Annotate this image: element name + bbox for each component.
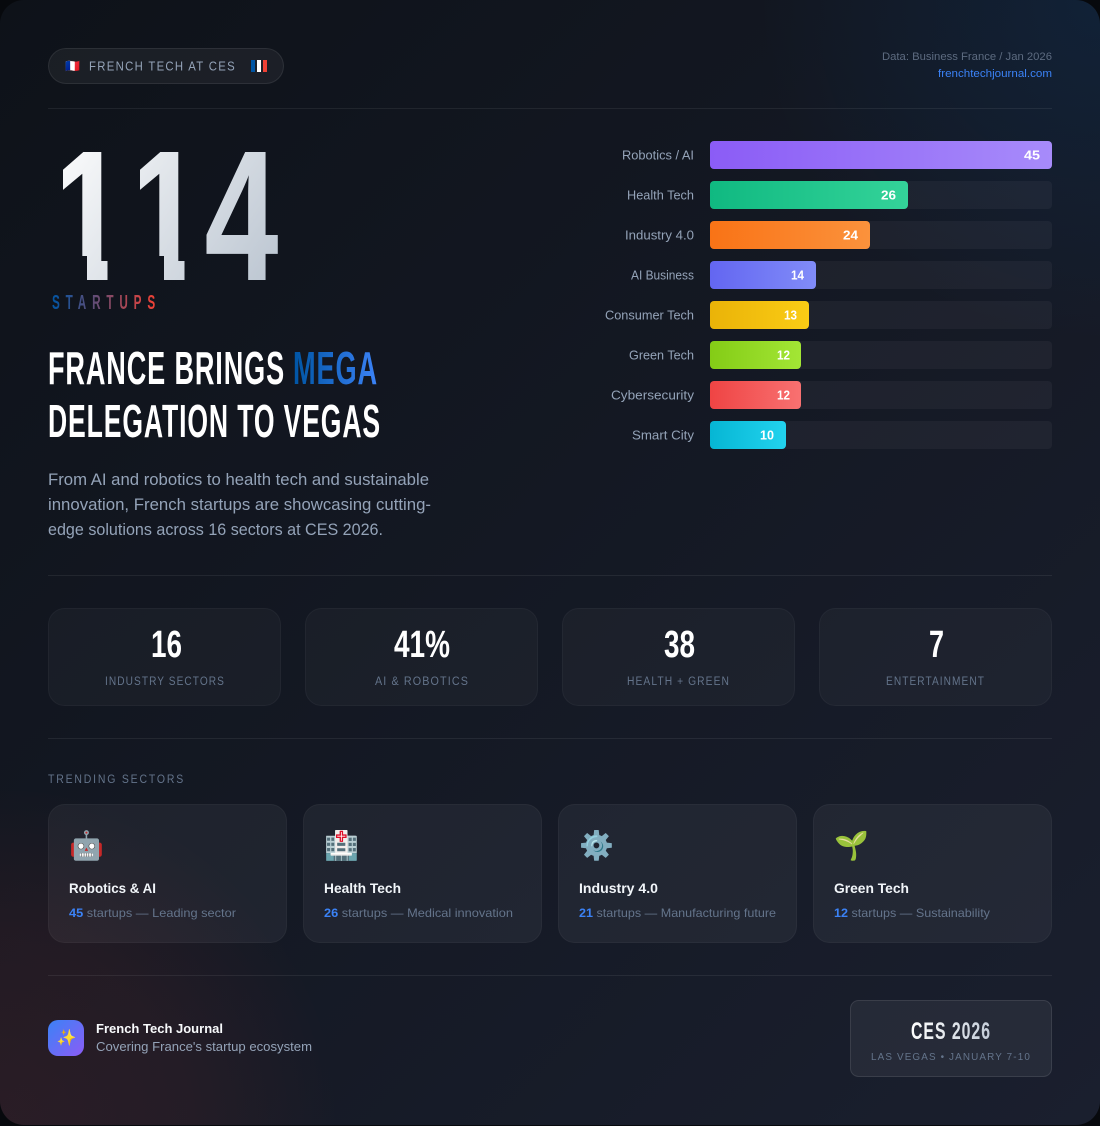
card title: Health Tech xyxy=(324,880,401,896)
stat card: entertainment xyxy=(820,608,1052,706)
intro paragraph: innovation, French startups are showcasing cutting- xyxy=(48,495,431,514)
source note: frenchtechjournal.com xyxy=(938,68,1052,80)
card detail: 45 startups — Leading sector xyxy=(69,906,236,920)
section heading: trending sectors: TRENDING SECTORS xyxy=(48,774,185,786)
headline: MEGA xyxy=(293,342,378,394)
stat card: AI and robotics xyxy=(306,608,538,706)
event badge: CES 2026: CES 2026 xyxy=(911,1018,991,1045)
card title: Industry 4.0 xyxy=(579,880,658,896)
bar chart: startups by sector: Robotics / AI xyxy=(622,148,694,162)
stat card: health and green xyxy=(562,608,794,706)
card detail: 26 startups — Medical innovation xyxy=(324,906,513,920)
card detail: 21 startups — Manufacturing future xyxy=(579,906,776,920)
sector card: health tech xyxy=(304,804,542,942)
bar chart: startups by sector: 14 xyxy=(791,268,805,282)
badge label: FRENCH TECH AT CES xyxy=(89,58,236,74)
intro paragraph: edge solutions across 16 sectors at CES 2026. xyxy=(48,520,383,539)
intro paragraph xyxy=(48,470,431,539)
card title: Green Tech xyxy=(834,880,909,896)
icon: French flag emoji: 🇫🇷 xyxy=(65,59,80,73)
icon: sparkles logo: ✨ xyxy=(56,1028,76,1047)
icon: sparkles logo xyxy=(48,1020,84,1056)
bar chart: startups by sector: 12 xyxy=(777,388,790,402)
bar chart: startups by sector: AI Business xyxy=(631,268,694,282)
event badge: CES 2026: LAS VEGAS • JANUARY 7-10 xyxy=(871,1051,1031,1063)
stat card: industry sectors: 16 xyxy=(151,624,182,666)
bar chart: startups by sector: Health Tech xyxy=(627,188,694,202)
icon: hospital: 🏥 xyxy=(324,829,359,862)
sector card: industry 4.0 xyxy=(558,804,796,942)
badge: French Tech at CES xyxy=(48,48,284,84)
bar chart: startups by sector: 13 xyxy=(784,308,797,322)
stat card: entertainment: ENTERTAINMENT xyxy=(886,676,985,688)
source note xyxy=(882,51,1052,80)
sector card: green tech xyxy=(814,804,1052,942)
hero number: 114: 1 xyxy=(50,113,127,320)
event badge: CES 2026 xyxy=(850,1000,1052,1076)
stat card: entertainment: 7 xyxy=(929,624,944,666)
stat card: health and green: 38 xyxy=(664,624,695,666)
stat card: AI and robotics: AI & ROBOTICS xyxy=(375,676,469,688)
stat card: industry sectors: INDUSTRY SECTORS xyxy=(105,676,225,688)
source note: Data: Business France / Jan 2026 xyxy=(882,51,1052,63)
icon: robot: 🤖 xyxy=(69,829,104,862)
icon: tricolour bars xyxy=(251,60,267,72)
bar chart: startups by sector: Industry 4.0 xyxy=(625,228,694,242)
brand tagline: Covering France's startup ecosystem xyxy=(96,1039,312,1054)
stat card: health and green: HEALTH + GREEN xyxy=(627,676,730,688)
hero number: 114: 4 xyxy=(204,113,278,320)
bar chart: startups by sector: Green Tech xyxy=(629,348,694,362)
bar chart: startups by sector xyxy=(605,141,1052,449)
headline: DELEGATION TO VEGAS xyxy=(48,395,381,447)
stat card: AI and robotics: 41% xyxy=(394,624,450,666)
card detail: 12 startups — Sustainability xyxy=(834,906,990,920)
icon: gear: ⚙️ xyxy=(579,829,614,862)
bar chart: startups by sector: 45 xyxy=(1024,148,1040,162)
hero label: startups: STARTUPS xyxy=(52,292,161,314)
icon: seedling: 🌱 xyxy=(834,829,869,862)
bar chart: startups by sector: Cybersecurity xyxy=(611,388,695,402)
headline: FRANCE BRINGS xyxy=(48,342,285,394)
card title: Robotics & AI xyxy=(69,880,156,896)
hero number: 114: 1 xyxy=(127,113,204,320)
bar chart: startups by sector: 26 xyxy=(881,188,896,202)
brand name: French Tech Journal xyxy=(96,1021,223,1036)
bar chart: startups by sector: 12 xyxy=(777,348,790,362)
bar chart: startups by sector: Smart City xyxy=(632,428,695,442)
headline xyxy=(48,342,381,447)
bar chart: startups by sector: Consumer Tech xyxy=(605,308,694,322)
bar chart: startups by sector: 10 xyxy=(760,428,774,442)
sector card: robotics and AI xyxy=(48,804,286,942)
footer brand xyxy=(48,1020,312,1056)
intro paragraph: From AI and robotics to health tech and sustainable xyxy=(48,470,429,489)
bar chart: startups by sector: 24 xyxy=(843,228,859,242)
stat card: industry sectors xyxy=(48,608,280,706)
